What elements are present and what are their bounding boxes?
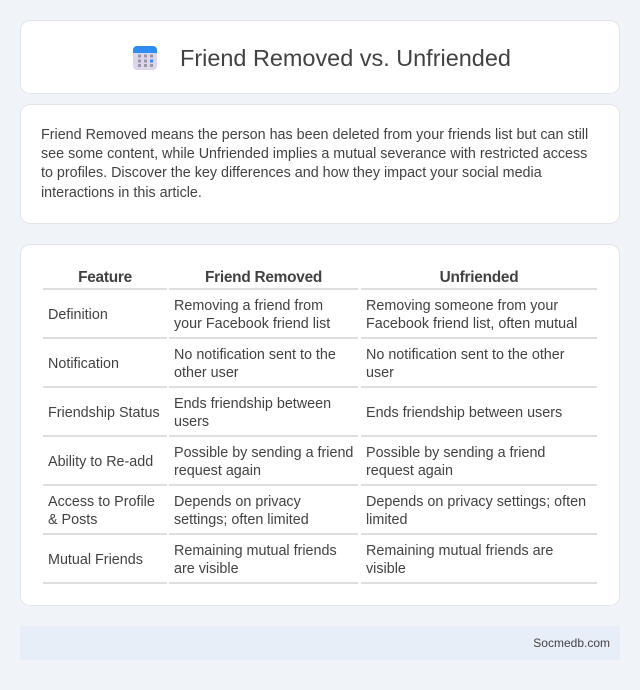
comparison table: user bbox=[366, 365, 394, 381]
icon: calendar bbox=[133, 46, 157, 70]
row: Access to Profile & Posts: Access to Profile bbox=[48, 494, 155, 510]
title: Friend Removed vs. Unfriended bbox=[180, 45, 511, 71]
header: Feature: Feature bbox=[78, 269, 132, 286]
comparison table: settings; often limited bbox=[174, 512, 309, 528]
comparison table bbox=[43, 269, 597, 584]
comparison table: Remaining mutual friends are bbox=[366, 543, 553, 559]
row: Access to Profile & Posts: & Posts bbox=[48, 512, 97, 528]
comparison table: request again bbox=[366, 463, 453, 479]
comparison table: are visible bbox=[174, 561, 239, 577]
comparison table: Facebook friend list, often mutual bbox=[366, 316, 577, 332]
row: Access to Profile & Posts bbox=[48, 494, 155, 528]
comparison table: visible bbox=[366, 561, 406, 577]
header: Unfriended: Unfriended bbox=[440, 269, 518, 286]
comparison table: other user bbox=[174, 365, 239, 381]
comparison table: Possible by sending a friend bbox=[366, 445, 545, 461]
comparison table: Removing a friend from bbox=[174, 298, 323, 314]
intro text: see some content, while Unfriended implies a mutual severance with restricted access bbox=[41, 146, 587, 162]
title card bbox=[20, 20, 620, 94]
comparison table: your Facebook friend list bbox=[174, 316, 330, 332]
row: Friendship Status: Friendship Status bbox=[48, 405, 160, 421]
comparison table: Ends friendship between users bbox=[366, 405, 562, 421]
row: Definition: Definition bbox=[48, 307, 108, 323]
intro text: Friend Removed means the person has been deleted from your friends list but can still bbox=[41, 126, 588, 142]
table card bbox=[20, 244, 620, 606]
footer bar bbox=[20, 626, 620, 660]
comparison table: Possible by sending a friend bbox=[174, 445, 353, 461]
intro text bbox=[41, 126, 588, 201]
row: Ability to Re-add: Ability to Re-add bbox=[48, 454, 153, 470]
comparison table: No notification sent to the bbox=[174, 347, 336, 363]
header: Friend Removed: Friend Removed bbox=[205, 269, 322, 286]
comparison table: request again bbox=[174, 463, 261, 479]
comparison table: Ends friendship between bbox=[174, 396, 331, 412]
comparison table: users bbox=[174, 414, 209, 430]
comparison table: limited bbox=[366, 512, 407, 528]
intro text: interactions in this article. bbox=[41, 185, 202, 201]
comparison table: Depends on privacy bbox=[174, 494, 301, 510]
comparison table: Depends on privacy settings; often bbox=[366, 494, 586, 510]
comparison table: Removing someone from your bbox=[366, 298, 558, 314]
comparison table: No notification sent to the other bbox=[366, 347, 565, 363]
row: Notification: Notification bbox=[48, 356, 119, 372]
comparison table: Remaining mutual friends bbox=[174, 543, 337, 559]
intro text: to profiles. Discover the key differences and how they impact your social media bbox=[41, 165, 542, 181]
intro card bbox=[20, 104, 620, 224]
footer source text: Socmedb.com bbox=[533, 636, 610, 650]
row: Mutual Friends: Mutual Friends bbox=[48, 552, 143, 568]
